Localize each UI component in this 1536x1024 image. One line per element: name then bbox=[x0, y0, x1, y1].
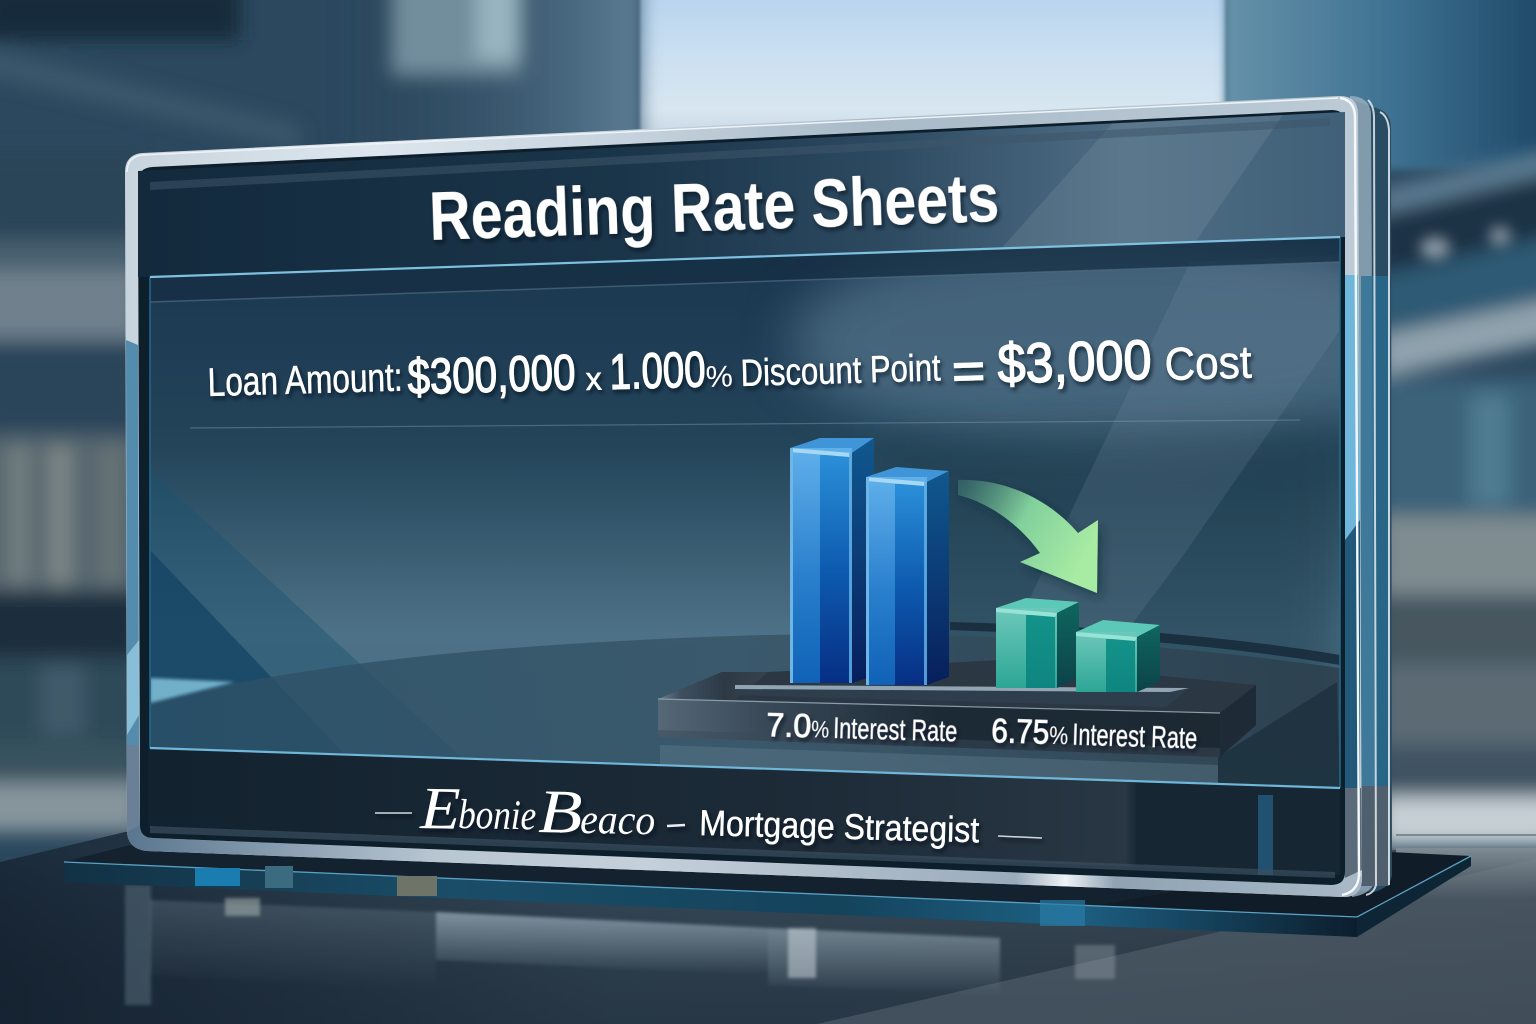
panel: title header bbox=[138, 112, 1345, 277]
formula line: Discount Point bbox=[740, 347, 942, 395]
floor bbox=[0, 832, 1536, 1024]
dark band below the header bbox=[150, 237, 1340, 302]
signature line bbox=[375, 775, 1042, 850]
darker right lower glass bbox=[900, 410, 1339, 668]
label: 6.75% interest rate: Interest Rate bbox=[1072, 717, 1198, 755]
label: 7.0% interest rate bbox=[766, 706, 958, 748]
signature line: eaco bbox=[580, 797, 656, 844]
diagonal light band right bbox=[1030, 263, 1339, 628]
round floor disc inside panel bbox=[151, 634, 1340, 783]
inner display panel bbox=[138, 110, 1450, 885]
lower-left triangular reflections bbox=[151, 493, 360, 677]
formula line: 1.000 bbox=[609, 341, 706, 400]
bar: blue second bbox=[866, 467, 949, 685]
signature line: B bbox=[538, 778, 583, 847]
glass stand base bbox=[64, 845, 1471, 937]
bar: blue tall bbox=[790, 438, 874, 683]
faint rule under formula bbox=[190, 420, 1300, 428]
signature line: Mortgage Strategist bbox=[699, 802, 980, 850]
panel: body glass bbox=[150, 238, 1340, 787]
window glints bbox=[1420, 237, 1450, 259]
signature line: bonie bbox=[458, 792, 537, 839]
formula line bbox=[207, 328, 1252, 405]
bar: teal first bbox=[996, 598, 1079, 688]
formula line: Loan Amount: bbox=[207, 356, 403, 405]
rear glass layers of the frame bbox=[1350, 96, 1392, 897]
formula line: $300,000 bbox=[407, 344, 576, 405]
label: 6.75% interest rate bbox=[991, 712, 1198, 756]
main metal glass frame bbox=[125, 96, 1362, 897]
dark panel backing bbox=[138, 110, 1345, 885]
arrow: rate drop bbox=[958, 480, 1098, 593]
table reflection below the platform bbox=[660, 745, 1218, 783]
bar: teal second bbox=[1076, 620, 1160, 692]
signature line: E bbox=[419, 775, 461, 842]
upper plate bbox=[735, 685, 1189, 707]
formula line: Cost bbox=[1164, 336, 1252, 390]
label: 6.75% interest rate: 6.75 bbox=[991, 712, 1050, 752]
bar chart bbox=[790, 438, 1160, 692]
blue content border bbox=[150, 237, 1340, 788]
platform for the bar chart bbox=[658, 660, 1256, 757]
formula line: x bbox=[585, 361, 602, 397]
label: 7.0% interest rate: Interest Rate bbox=[833, 712, 958, 748]
label: 7.0% interest rate: 7.0 bbox=[766, 706, 812, 744]
title: Reading Rate Sheets bbox=[428, 159, 1000, 255]
formula line: = bbox=[951, 345, 986, 399]
label: 6.75% interest rate: % bbox=[1049, 722, 1069, 750]
floor reflections bbox=[125, 885, 1115, 1005]
top-right glow bbox=[778, 246, 1340, 455]
formula line: $3,000 bbox=[997, 328, 1152, 395]
lower plate bbox=[658, 660, 1256, 713]
sky bbox=[640, 0, 1226, 180]
formula line: % bbox=[705, 360, 733, 394]
panel: footer band bbox=[148, 748, 1340, 875]
label: 7.0% interest rate: % bbox=[811, 716, 830, 744]
